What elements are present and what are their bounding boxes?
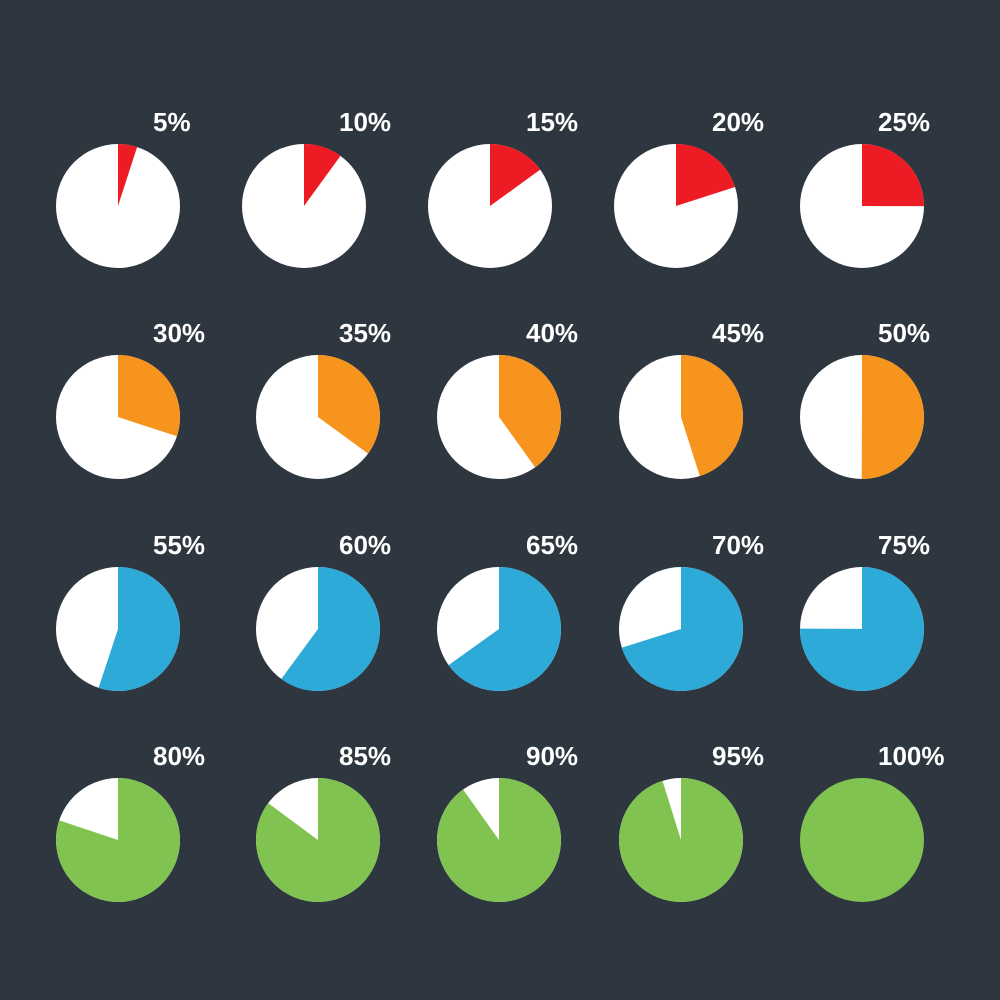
pie 100% [800, 741, 944, 902]
pie 80%: 80% [153, 741, 205, 771]
pie 85%: 85% [339, 741, 391, 771]
pie 100%: 100% [878, 741, 944, 771]
pie 70%: 70% [712, 530, 764, 560]
pie 80% [56, 741, 205, 902]
row 1: red pies [56, 107, 930, 268]
pie 40%: 40% [526, 318, 578, 348]
pie 65%: 65% [526, 530, 578, 560]
pie 15% [428, 107, 578, 268]
pie 65% [437, 530, 578, 691]
pie 5%: 5% [153, 107, 191, 137]
pie 60%: 60% [339, 530, 391, 560]
pie 35%: 35% [339, 318, 391, 348]
row 3: blue pies [56, 530, 930, 691]
pie 35% [256, 318, 391, 479]
pie 75% [800, 530, 930, 691]
pie 45% [619, 318, 764, 479]
pie 10% [242, 107, 391, 268]
pie 20% [614, 107, 764, 268]
pie 30%: 30% [153, 318, 205, 348]
pie 25% [800, 107, 930, 268]
pie 90%: 90% [526, 741, 578, 771]
pie 10%: 10% [339, 107, 391, 137]
pie 25%: 25% [878, 107, 930, 137]
pie 40% [437, 318, 578, 479]
pie 95%: 95% [712, 741, 764, 771]
pie 55% [56, 530, 205, 691]
pie 45%: 45% [712, 318, 764, 348]
pie 15%: 15% [526, 107, 578, 137]
row 4: green pies [56, 741, 944, 902]
pie 30% [56, 318, 205, 479]
pie 20%: 20% [712, 107, 764, 137]
pie 60% [256, 530, 391, 691]
row 2: orange pies [56, 318, 930, 479]
pie 90% [437, 741, 578, 902]
pie 50%: 50% [878, 318, 930, 348]
pie 70% [619, 530, 764, 691]
pie 85% [256, 741, 391, 902]
pie 5% [56, 107, 191, 268]
pie 55%: 55% [153, 530, 205, 560]
pie 50% [800, 318, 930, 479]
pie 75%: 75% [878, 530, 930, 560]
pie 95% [619, 741, 764, 902]
